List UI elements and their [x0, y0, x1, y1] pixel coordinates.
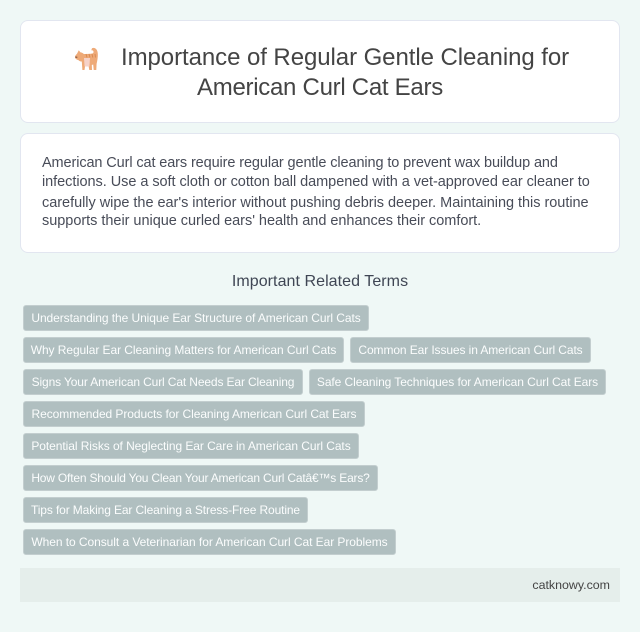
footer text: catknowy.com	[532, 578, 610, 592]
tag 1	[23, 305, 369, 331]
text line 4: supports their unique curled ears' health and enhances their comfort.	[42, 213, 481, 229]
tag 7	[23, 433, 359, 459]
tag 4: Signs Your American Curl Cat Needs Ear Cleaning	[32, 375, 294, 389]
tag 3: Common Ear Issues in American Curl Cats	[358, 343, 583, 357]
tag 6: Recommended Products for Cleaning American Curl Cat Ears	[32, 407, 356, 421]
tag 2: Why Regular Ear Cleaning Matters for American Curl Cats	[31, 343, 336, 357]
tag 3	[350, 337, 591, 363]
text line 1: American Curl cat ears require regular gentle cleaning to prevent wax buildup and	[42, 155, 558, 171]
tag 9	[23, 497, 308, 523]
tag 9: Tips for Making Ear Cleaning a Stress-Free Routine	[31, 503, 300, 517]
tag 10: When to Consult a Veterinarian for American Curl Cat Ear Problems	[31, 535, 388, 549]
heading: related terms: Important Related Terms	[232, 273, 408, 290]
tag 2	[23, 337, 344, 363]
tag 6	[23, 401, 365, 427]
heading line 2: American Curl Cat Ears	[197, 74, 443, 101]
tag 8	[23, 465, 378, 491]
footer bar	[20, 568, 620, 602]
heading line 1: Importance of Regular Gentle Cleaning for	[121, 44, 569, 71]
tag 8: How Often Should You Clean Your American Curl Catâ€™s Ears?	[31, 471, 370, 485]
text line 2: infections. Use a soft cloth or cotton ball dampened with a vet-approved ear cleaner to	[42, 174, 590, 190]
panel: description card	[20, 133, 620, 253]
tag 5: Safe Cleaning Techniques for American Curl Cat Ears	[317, 375, 598, 389]
tag 10	[23, 529, 396, 555]
icon: cat	[75, 48, 98, 70]
tag 1: Understanding the Unique Ear Structure of American Curl Cats	[31, 311, 361, 325]
panel: title card	[20, 20, 620, 123]
tag 7: Potential Risks of Neglecting Ear Care in American Curl Cats	[31, 439, 351, 453]
tag 5	[309, 369, 606, 395]
text line 3: carefully wipe the ear's interior without pushing debris deeper. Maintaining this routine	[42, 194, 589, 210]
tag 4	[23, 369, 303, 395]
